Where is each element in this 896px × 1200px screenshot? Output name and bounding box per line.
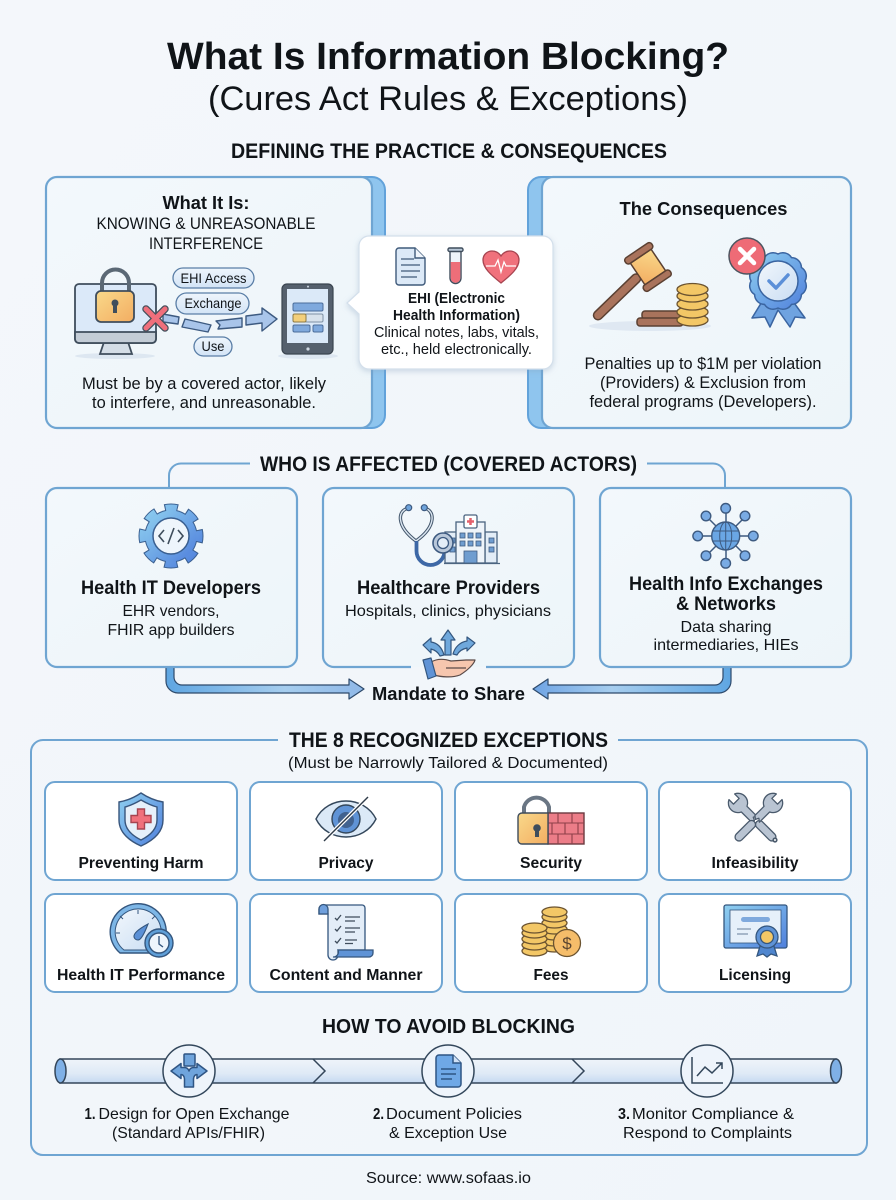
card: security — [455, 782, 647, 880]
icon: interrupted arrow — [146, 308, 277, 332]
text: step 2: Document Policies — [386, 1106, 522, 1123]
label: health IT performance: Health IT Performance — [57, 967, 225, 984]
text: step 1: Design for Open Exchange — [98, 1106, 290, 1123]
label: security: Security — [520, 855, 582, 872]
card: infeasibility — [659, 782, 851, 880]
heading: what it is: What It Is: — [162, 192, 250, 213]
text: providers: Hospitals, clinics, physicians — [345, 603, 551, 620]
panel: health IT developers — [46, 488, 297, 667]
heading: exceptions: THE 8 RECOGNIZED EXCEPTIONS — [289, 729, 608, 752]
text: what it is note: to interfere, and unreasonable. — [92, 394, 316, 412]
label: fees: Fees — [534, 967, 569, 984]
heading: who is affected: WHO IS AFFECTED (COVERED ACTORS) — [260, 453, 637, 476]
text: step 2: 2. — [373, 1106, 384, 1123]
pill: EHI Access: EHI Access — [180, 270, 246, 286]
text: penalties: Penalties up to $1M per violation — [584, 355, 822, 373]
icon: trend chart — [681, 1045, 733, 1097]
card: fees — [455, 894, 647, 992]
panel: the 8 recognized exceptions — [31, 729, 867, 1155]
icon: coin stacks: $ — [562, 934, 572, 953]
heading: what it is — [96, 192, 316, 253]
icon: document — [396, 248, 425, 285]
text: providers: Healthcare Providers — [357, 578, 540, 599]
panel: healthcare providers — [323, 488, 574, 667]
panel: what it is — [46, 177, 385, 428]
text: EHI definition: etc., held electronically. — [381, 342, 532, 358]
icon: gavel and coins — [589, 241, 711, 331]
card: health IT performance — [45, 894, 237, 992]
icon: crossed-out eye — [316, 797, 376, 841]
text: developers: FHIR app builders — [108, 622, 234, 639]
label: mandate to share: Mandate to Share — [372, 684, 525, 704]
text: what it is note — [82, 375, 327, 412]
pill: Exchange: Exchange — [184, 295, 242, 311]
icon: open hand sharing — [423, 630, 475, 679]
icon: certificate — [724, 905, 787, 957]
chart: three step pipeline — [55, 1045, 842, 1097]
label: preventing harm: Preventing Harm — [78, 855, 204, 872]
label: infeasibility: Infeasibility — [712, 855, 799, 872]
icon: document policy — [422, 1045, 474, 1097]
icon: code gear — [142, 507, 200, 565]
icon: network globe — [693, 504, 758, 568]
icon: test tube — [448, 248, 463, 284]
text: EHI definition: EHI (Electronic — [408, 291, 505, 307]
pill: Exchange — [176, 293, 249, 314]
heading: what it is: INTERFERENCE — [149, 235, 263, 253]
icon: stethoscope — [400, 505, 444, 565]
card: licensing — [659, 894, 851, 992]
panel: health info exchanges — [600, 488, 851, 667]
card: privacy — [250, 782, 442, 880]
text: step 3: Monitor Compliance & — [632, 1106, 794, 1123]
text: developers — [81, 578, 261, 639]
icon: revoked certification badge — [729, 238, 806, 327]
icon: tablet — [278, 284, 338, 359]
icon: shield — [119, 793, 163, 846]
card: preventing harm — [45, 782, 237, 880]
text: penalties: (Providers) & Exclusion from — [600, 374, 806, 392]
heading: exceptions: (Must be Narrowly Tailored & Documented) — [288, 755, 608, 772]
label: content and manner: Content and Manner — [270, 967, 422, 984]
arrow: right to mandate — [533, 667, 731, 699]
heading: exceptions — [288, 729, 608, 772]
text: developers: Health IT Developers — [81, 578, 261, 599]
arrow: left to mandate — [166, 667, 364, 699]
text: exchanges: intermediaries, HIEs — [654, 637, 798, 654]
text: step 1: (Standard APIs/FHIR) — [112, 1125, 265, 1142]
pill: Use — [194, 337, 232, 356]
text: step 1 — [84, 1106, 290, 1142]
text: what it is note: Must be by a covered actor, likely — [82, 375, 327, 393]
text: step 3: Respond to Complaints — [623, 1125, 792, 1142]
heading: the consequences: The Consequences — [620, 198, 788, 219]
panel: the consequences — [528, 177, 851, 428]
icon: heart with pulse — [483, 251, 519, 283]
title: What Is Information Blocking? — [167, 36, 729, 78]
pill: Use: Use — [202, 338, 225, 354]
icon: locked computer — [75, 270, 156, 359]
text: exchanges — [629, 574, 823, 654]
text: step 3 — [618, 1106, 794, 1142]
text: penalties — [584, 355, 822, 411]
text: step 2 — [373, 1106, 522, 1142]
text: EHI definition: Clinical notes, labs, vitals, — [374, 325, 539, 341]
source line: Source: www.sofaas.io — [366, 1170, 531, 1187]
text: EHI definition: Health Information) — [393, 308, 520, 324]
text: providers — [345, 578, 551, 620]
label: licensing: Licensing — [719, 967, 791, 984]
text: step 2: & Exception Use — [389, 1125, 507, 1142]
text: developers: EHR vendors, — [122, 603, 220, 620]
title — [167, 36, 729, 118]
label: privacy: Privacy — [318, 855, 374, 872]
text: step 3: 3. — [618, 1106, 630, 1123]
text: EHI definition — [374, 291, 539, 358]
icon: coin stacks — [522, 907, 580, 956]
text: step 1: 1. — [84, 1106, 96, 1123]
icon: checklist scroll — [319, 904, 373, 960]
icon: broken wrenches — [725, 790, 786, 847]
card: content and manner — [250, 894, 442, 992]
icon: hospital — [433, 515, 500, 564]
icon: padlock and firewall — [518, 798, 584, 844]
icon: gauge and clock — [110, 904, 173, 957]
heading: who is affected — [169, 453, 725, 488]
heading: what it is: KNOWING & UNREASONABLE — [96, 215, 316, 233]
icon: diverging arrows — [163, 1045, 215, 1097]
heading: how to avoid blocking: HOW TO AVOID BLOCKING — [322, 1016, 575, 1038]
text: penalties: federal programs (Developers). — [590, 393, 816, 411]
text: exchanges: Data sharing — [680, 619, 772, 636]
title: (Cures Act Rules & Exceptions) — [208, 80, 688, 118]
text: exchanges: & Networks — [676, 594, 776, 615]
heading: defining the practice: DEFINING THE PRACTICE & CONSEQUENCES — [231, 140, 667, 163]
text: exchanges: Health Info Exchanges — [629, 574, 823, 595]
callout: EHI definition — [347, 236, 553, 369]
